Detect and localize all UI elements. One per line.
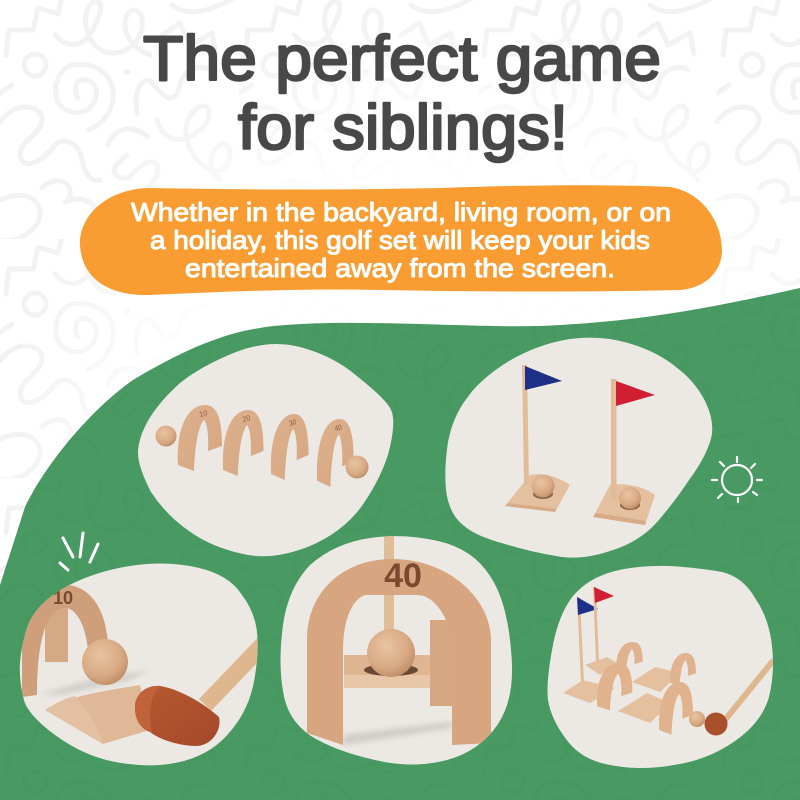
arch 3: 30 — [289, 419, 297, 428]
red pennant — [616, 381, 655, 406]
arch 4 — [317, 419, 354, 487]
arch 4: 40 — [334, 424, 343, 434]
ball in blue base — [532, 474, 554, 498]
icon: sun — [712, 457, 762, 502]
back arch leg — [430, 620, 453, 706]
base — [344, 655, 430, 688]
mallet handle — [199, 638, 258, 711]
wedge — [45, 685, 150, 744]
callout text — [131, 197, 671, 283]
arch 3 — [271, 414, 309, 480]
callout text: a holiday, this golf set will keep your kids — [150, 225, 650, 255]
green field — [0, 288, 800, 800]
blue pennant — [525, 366, 562, 390]
arches — [597, 642, 696, 735]
ball — [689, 711, 705, 727]
red flag pole — [611, 379, 616, 485]
arch 2: 20 — [242, 413, 251, 424]
photo: full golf set — [548, 566, 773, 768]
orange callout — [80, 185, 722, 295]
ball — [367, 629, 415, 677]
icon: sparkle lines — [60, 533, 98, 570]
red flag pole — [593, 587, 599, 662]
red pennant — [594, 587, 614, 603]
blue flag pole — [577, 598, 584, 682]
floor shadow — [38, 670, 150, 695]
blue flag base — [505, 474, 570, 512]
flag pole — [384, 536, 394, 630]
arch — [307, 559, 491, 745]
photo: four arches and two balls — [138, 344, 394, 556]
arch — [22, 585, 108, 697]
blue flag pole — [522, 365, 529, 485]
blue pennant — [577, 597, 598, 615]
floor shadows — [343, 722, 452, 745]
photo: close-up of mallet, ball and arch — [20, 564, 258, 766]
ball in red base — [619, 487, 641, 509]
callout text: entertained away from the screen. — [185, 253, 615, 283]
red flag base — [593, 484, 655, 525]
mallet head — [704, 712, 728, 736]
wedges — [563, 657, 680, 723]
left ball — [156, 426, 176, 446]
title: for siblings! — [238, 93, 568, 163]
arch number: 40 — [384, 557, 422, 595]
photo: arch 40 in front of flag — [280, 536, 512, 764]
title — [143, 24, 661, 163]
photo: two flags — [445, 338, 712, 558]
title: The perfect game — [143, 24, 661, 94]
arch 1: 10 — [198, 408, 209, 419]
arch 2 — [223, 410, 264, 476]
ball — [82, 639, 128, 685]
back arch leg — [45, 608, 68, 662]
right ball — [346, 456, 368, 478]
arch 1 — [178, 405, 222, 471]
mallet head — [135, 686, 220, 746]
callout text: Whether in the backyard, living room, or on — [131, 197, 671, 227]
mallet handle — [725, 662, 772, 720]
arch number: 10 — [53, 588, 73, 608]
